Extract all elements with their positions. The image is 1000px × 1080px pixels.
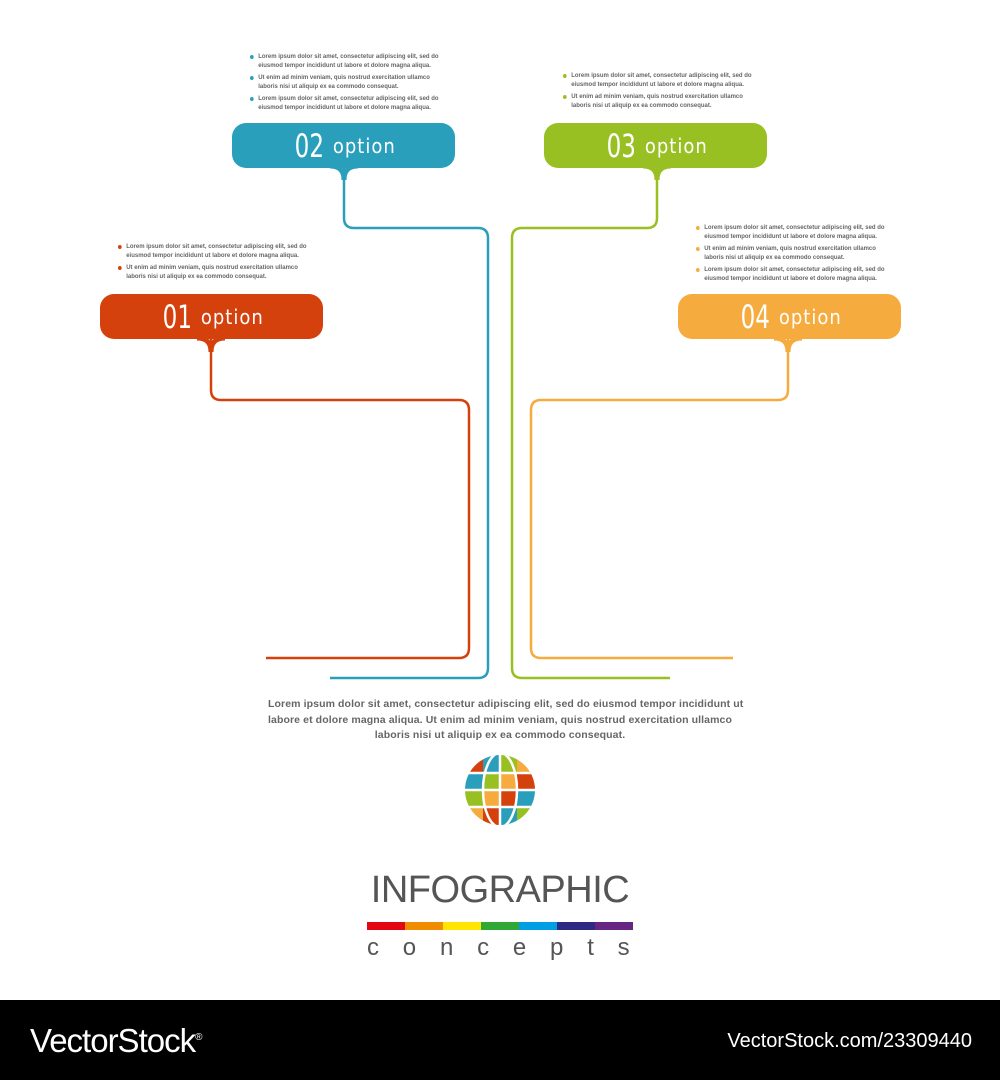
central text [268,698,744,741]
text: option 04 [696,224,885,282]
text: option 03: Ut enim ad minim veniam, quis nostrud exercitation ullamco [571,93,743,100]
pill: 02 option: 02 [295,126,324,164]
pill: 02 option: option [333,134,396,158]
pill: 03 option: 03 [607,126,636,164]
text: option 04: Ut enim ad minim veniam, quis nostrud exercitation ullamco [704,245,876,252]
text: option 02: Ut enim ad minim veniam, quis nostrud exercitation ullamco [258,74,430,81]
text: option 02: laboris nisi ut aliquip ex ea commodo consequat. [258,82,399,90]
text: option 03: laboris nisi ut aliquip ex ea commodo consequat. [571,102,712,108]
pill: 01 option: 01 [163,298,192,336]
icon: globe [465,755,535,825]
text: option 01 [118,243,307,280]
text: option 04: Lorem ipsum dolor sit amet, consectetur adipiscing elit, sed do [704,266,885,273]
pill: 02 option [232,123,455,168]
text: option 01: Ut enim ad minim veniam, quis nostrud exercitation ullamco [126,264,298,271]
rainbow bar [367,922,633,930]
subtitle: concepts: concepts [367,934,653,961]
footer bar: VectorStock.com/23309440 [727,1030,972,1052]
text: option 04: eiusmod tempor incididunt ut labore et dolore magna aliqua. [704,232,877,240]
text: option 03 [563,72,752,108]
text: option 04: Lorem ipsum dolor sit amet, consectetur adipiscing elit, sed do [704,224,885,231]
footer bar [0,1000,1000,1080]
pill: 04 option [678,294,901,339]
text: option 01: laboris nisi ut aliquip ex ea commodo consequat. [126,272,267,280]
text: option 04: eiusmod tempor incididunt ut labore et dolore magna aliqua. [704,274,877,282]
text: option 01: Lorem ipsum dolor sit amet, consectetur adipiscing elit, sed do [126,243,307,250]
text: option 03: Lorem ipsum dolor sit amet, consectetur adipiscing elit, sed do [571,72,752,79]
pill: 04 option: option [779,304,842,328]
central text: laboris nisi ut aliquip ex ea commodo consequat. [375,729,625,741]
title: INFOGRAPHIC: INFOGRAPHIC [371,869,629,911]
pill: 03 option: option [645,134,708,158]
text: option 03: eiusmod tempor incididunt ut labore et dolore magna aliqua. [571,80,744,88]
pill: 04 option: 04 [741,298,770,336]
central text: Lorem ipsum dolor sit amet, consectetur adipiscing elit, sed do eiusmod tempor incididunt ut [268,698,743,710]
text: option 02: eiusmod tempor incididunt ut labore et dolore magna aliqua. [258,62,431,68]
text: option 04: laboris nisi ut aliquip ex ea commodo consequat. [704,254,845,260]
pill: 03 option [544,123,767,168]
text: option 02 [250,53,439,110]
text: option 02: Lorem ipsum dolor sit amet, consectetur adipiscing elit, sed do [258,95,439,102]
text: option 01: eiusmod tempor incididunt ut labore et dolore magna aliqua. [126,252,299,258]
pill: 01 option: option [201,304,264,328]
pill: 01 option [100,294,323,339]
text: option 02: eiusmod tempor incididunt ut labore et dolore magna aliqua. [258,104,431,110]
central text: labore et dolore magna aliqua. Ut enim ad minim veniam, quis nostrud exercitation ullamco [268,714,732,726]
footer bar: VectorStock® [30,1022,201,1059]
text: option 02: Lorem ipsum dolor sit amet, consectetur adipiscing elit, sed do [258,53,439,60]
